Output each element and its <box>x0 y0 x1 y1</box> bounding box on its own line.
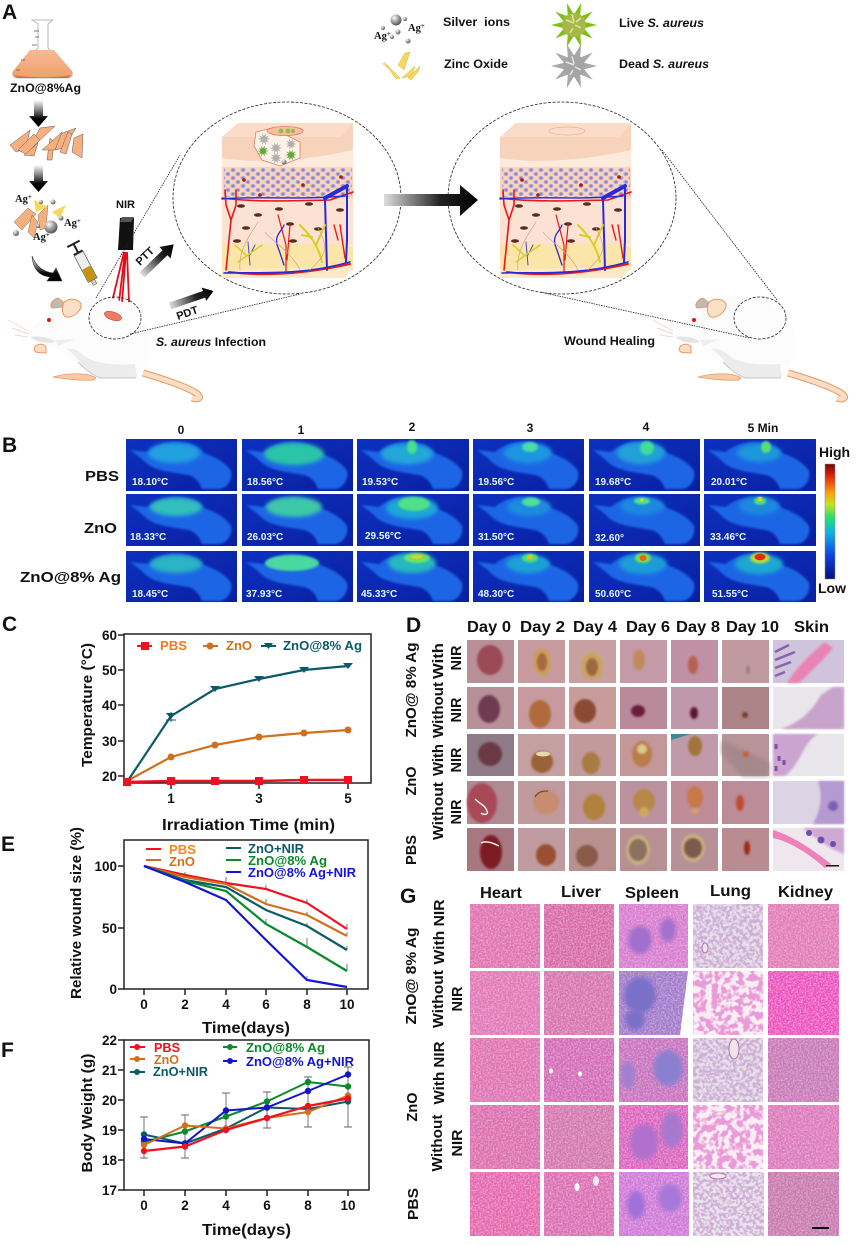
panel G: organ histology <box>400 883 839 1236</box>
legend: ZnO <box>169 854 195 869</box>
column headers: Day 6 <box>626 619 670 636</box>
panel letter F: F <box>1 1039 14 1062</box>
legend: PBS <box>169 842 196 857</box>
label NIR: NIR <box>116 199 135 211</box>
histology row 1 <box>470 904 839 968</box>
label PDT: PDT <box>175 304 200 323</box>
x axis title: Time(days) <box>202 1020 290 1037</box>
laser beams <box>112 252 129 302</box>
column headers: Day 10 <box>726 619 779 636</box>
arrow: PTT <box>136 239 179 281</box>
column headers: Day 0 <box>467 619 511 636</box>
y axis title: Temperature (°C) <box>80 643 96 767</box>
legend: ZnO+NIR <box>248 841 305 856</box>
series: ZnO@8% Ag <box>127 663 353 782</box>
histology row 5 <box>470 1172 839 1236</box>
x ticks <box>167 791 352 806</box>
wound row 2 <box>467 687 844 729</box>
icon: flakes loaded with silver ions <box>13 193 81 243</box>
colour scale bar: Low <box>818 580 846 596</box>
legend: ZnO@8% Ag+NIR <box>248 865 357 880</box>
panel letter D: D <box>406 614 421 637</box>
x ticks: 3 <box>255 791 263 806</box>
column headers: 4 <box>643 420 650 434</box>
wound row 5 <box>467 828 844 871</box>
column headers: Day 8 <box>676 619 720 636</box>
column headers: Day 2 <box>520 619 565 636</box>
histology row 2 <box>470 971 839 1035</box>
thermal row: ZnO: 29.56°C <box>365 531 401 542</box>
legend: ZnO <box>226 638 252 653</box>
column headers: 1 <box>298 423 305 437</box>
axes <box>118 840 368 995</box>
legend: dead bacteria icon <box>551 44 597 88</box>
icon: flakes loaded with silver ions: + <box>46 231 50 239</box>
icon: healed mouse <box>653 296 844 399</box>
icon: syringe <box>67 240 101 288</box>
row labels: PBS <box>406 1188 422 1220</box>
panel E: wound size chart <box>1 827 368 1037</box>
icon: flakes loaded with silver ions: Ag <box>64 218 77 229</box>
row labels: ZnO <box>405 1092 421 1122</box>
x ticks: 0 <box>140 1198 148 1213</box>
column headers <box>178 420 778 437</box>
x ticks: 1 <box>167 791 175 806</box>
row labels: NIR <box>449 697 465 722</box>
column headers: Heart <box>480 885 522 902</box>
y ticks: 20 <box>102 1093 117 1108</box>
y ticks: 30 <box>102 734 117 749</box>
icon: infected mouse <box>8 296 199 399</box>
big arrow to healed skin <box>384 185 478 216</box>
x ticks: 8 <box>303 997 311 1012</box>
legend: silver ions icon: + <box>387 30 391 38</box>
series: ZnO@8% Ag+NIR <box>141 1071 351 1147</box>
y axis title: Relative wound size (%) <box>69 827 85 999</box>
arrow: curved to mouse <box>32 256 62 281</box>
thermal row: ZnO: 26.03°C <box>247 532 283 543</box>
column headers: Spleen <box>625 885 679 902</box>
icon: flakes loaded with silver ions: + <box>28 193 32 201</box>
row labels: With NIR <box>432 1041 448 1104</box>
column headers: 0 <box>178 423 185 437</box>
icon: ZnO flakes <box>10 126 83 160</box>
thermal row: PBS: 19.53°C <box>362 477 398 488</box>
legend: silver ions icon: Ag <box>408 23 421 34</box>
legend: PBS <box>160 638 187 653</box>
y ticks <box>94 859 117 997</box>
legend: ZnO+NIR <box>153 1064 209 1079</box>
thermal row: ZnO@8% Ag: 18.45°C <box>132 589 168 600</box>
y ticks: 19 <box>102 1123 117 1138</box>
x ticks: 4 <box>222 997 230 1012</box>
legend: live bacteria label: Live S. aureus <box>619 16 704 30</box>
thermal row: ZnO@8% Ag: 51.55°C <box>712 589 748 600</box>
wound row 3 <box>467 734 844 776</box>
column headers: Skin <box>794 619 829 636</box>
x ticks <box>140 997 355 1012</box>
row labels: With NIR <box>432 899 448 964</box>
row labels <box>404 642 465 865</box>
legend <box>130 1040 355 1079</box>
thermal row: ZnO: 18.33°C <box>130 532 166 543</box>
y ticks: 60 <box>102 628 117 643</box>
colour scale bar: High <box>819 444 850 460</box>
thermal row: PBS: 19.68°C <box>595 477 631 488</box>
label PTT: PTT <box>134 245 157 268</box>
series: ZnO@8% Ag+NIR <box>144 866 347 987</box>
thermal row: PBS: 18.56°C <box>247 477 283 488</box>
label S. aureus Infection: S. aureus Infection <box>156 335 266 349</box>
panel C: temperature chart <box>2 613 371 834</box>
series: ZnO@8% Ag <box>144 866 347 971</box>
legend: silver ions icon <box>374 14 425 44</box>
error bars <box>140 1067 352 1158</box>
legend <box>146 841 357 880</box>
row labels: NIR <box>449 645 465 670</box>
column headers <box>467 619 829 636</box>
panel D: wound photographs <box>404 614 844 871</box>
legend: silver ions icon: Ag <box>374 31 387 42</box>
row labels: ZnO <box>404 766 420 796</box>
panel letter C: C <box>2 613 17 636</box>
legend: silver ions label: Silver ions <box>443 15 510 29</box>
y axis title: Body Weight (g) <box>80 1053 96 1173</box>
legend: silver ions icon: + <box>421 22 425 30</box>
skin block: healed <box>500 123 631 278</box>
histology row 3 <box>470 1038 839 1102</box>
right zoom outline <box>448 102 786 339</box>
x ticks: 8 <box>304 1198 312 1213</box>
column headers: Day 4 <box>573 619 617 636</box>
legend: live bacteria icon <box>551 3 597 47</box>
scale bar <box>826 865 839 866</box>
row labels: NIR <box>449 747 465 772</box>
thermal row: ZnO@8% Ag: 50.60°C <box>595 589 631 600</box>
x ticks: 5 <box>344 791 352 806</box>
row labels: ZnO@8% Ag <box>20 569 121 586</box>
arrow: PDT <box>168 284 216 313</box>
series: ZnO+NIR <box>144 866 347 950</box>
x ticks: 6 <box>262 997 270 1012</box>
x axis title: Time(days) <box>202 1222 291 1239</box>
y ticks: 50 <box>102 921 117 936</box>
arrow: flask to flakes <box>29 100 48 127</box>
legend: ZnO@8% Ag <box>248 853 327 868</box>
row labels <box>20 468 121 586</box>
thermal row: PBS: 20.01°C <box>711 477 747 488</box>
thermal row: ZnO@8% Ag: 48.30°C <box>478 589 514 600</box>
column headers: 3 <box>527 421 534 435</box>
series: PBS <box>141 1095 351 1154</box>
y ticks: 40 <box>102 698 117 713</box>
row labels: NIR <box>450 1129 466 1156</box>
thermal row: PBS: 18.10°C <box>132 477 168 488</box>
thermal row: PBS: 19.56°C <box>478 477 514 488</box>
icon: flakes loaded with silver ions: + <box>77 217 81 225</box>
axes <box>118 634 371 789</box>
error bars <box>185 872 347 980</box>
panel F: body weight chart <box>1 1033 369 1239</box>
row labels: Without <box>430 1114 446 1172</box>
flask label: ZnO@8%Ag <box>10 81 81 95</box>
x ticks: 2 <box>181 997 189 1012</box>
thermal row: ZnO@8% Ag: 37.93°C <box>246 589 282 600</box>
left zoom outline <box>89 102 401 339</box>
legend: ZnO <box>154 1052 179 1067</box>
thermal row: ZnO: 31.50°C <box>478 532 514 543</box>
thermal row: ZnO: 33.46°C <box>710 532 746 543</box>
histology row 4 <box>470 1105 839 1169</box>
column headers <box>480 883 833 902</box>
x ticks <box>140 1198 356 1213</box>
legend: zinc oxide label: Zinc Oxide <box>444 57 508 71</box>
panel letter A: A <box>2 1 17 24</box>
x ticks: 2 <box>181 1198 189 1213</box>
arrow: flakes to silver-loaded flakes <box>29 165 48 192</box>
wound row 4 <box>467 781 844 824</box>
x ticks: 4 <box>222 1198 230 1213</box>
icon: flakes loaded with silver ions: Ag <box>33 232 46 243</box>
row labels: PBS <box>85 468 119 485</box>
icon: NIR camera <box>118 217 134 250</box>
legend: ZnO@8% Ag+NIR <box>246 1054 355 1069</box>
icon: flakes loaded with silver ions: Ag <box>15 194 28 205</box>
thermal row: ZnO <box>126 494 816 546</box>
icon: flask of ZnO@8%Ag <box>13 20 72 78</box>
row labels: ZnO <box>84 520 117 537</box>
series: ZnO <box>144 866 347 936</box>
panel B: thermal images <box>2 420 850 602</box>
y ticks: 17 <box>102 1183 117 1198</box>
y ticks <box>102 1033 117 1198</box>
column headers: Liver <box>561 884 601 901</box>
row labels: ZnO@ 8% Ag <box>404 642 420 738</box>
x ticks: 10 <box>339 997 355 1012</box>
row labels: With <box>431 643 447 679</box>
panel letter B: B <box>2 434 17 457</box>
thermal row: PBS <box>126 439 816 491</box>
row labels <box>404 899 466 1220</box>
row labels: Without <box>431 682 447 738</box>
row labels: PBS <box>404 835 420 865</box>
skin block: infected <box>222 123 353 278</box>
thermal row: ZnO: 32.60° <box>595 533 624 544</box>
column headers: 2 <box>409 420 416 434</box>
panel letter E: E <box>1 833 15 856</box>
x ticks: 10 <box>340 1198 356 1213</box>
colour scale bar <box>818 444 850 596</box>
row labels: Without <box>431 970 447 1028</box>
legend: ZnO@8% Ag <box>283 638 362 653</box>
y ticks: 0 <box>109 982 117 997</box>
legend: dead bacteria label: Dead S. aureus <box>619 57 709 71</box>
y ticks: 21 <box>102 1063 117 1078</box>
series: PBS <box>144 866 347 929</box>
y ticks: 20 <box>102 769 117 784</box>
row labels: NIR <box>450 986 466 1012</box>
series: ZnO <box>127 726 352 781</box>
legend <box>137 638 362 653</box>
series: ZnO@8% Ag <box>141 1079 351 1145</box>
x ticks: 0 <box>140 997 148 1012</box>
row labels: Without <box>431 782 447 840</box>
y ticks: 50 <box>102 663 117 678</box>
x ticks: 6 <box>263 1198 271 1213</box>
x axis title: Irradiation Time (min) <box>162 817 335 834</box>
legend: PBS <box>154 1040 180 1055</box>
series: PBS <box>123 776 352 786</box>
y ticks: 18 <box>102 1153 117 1168</box>
row labels: NIR <box>449 799 465 824</box>
legend: zinc oxide icon <box>382 52 420 80</box>
axes <box>118 1040 369 1196</box>
y ticks: 22 <box>102 1033 117 1048</box>
legend: ZnO@8% Ag <box>246 1040 325 1055</box>
label Wound Healing: Wound Healing <box>564 334 655 348</box>
column headers: Kidney <box>778 884 833 901</box>
series: ZnO+NIR <box>141 1098 351 1147</box>
scale bar <box>812 1227 829 1229</box>
y ticks: 100 <box>94 859 117 874</box>
wound row 1 <box>467 640 844 683</box>
thermal row: ZnO@8% Ag <box>126 551 816 602</box>
row labels: With <box>431 744 447 776</box>
row labels: ZnO@ 8% Ag <box>404 927 420 1025</box>
panel letter G: G <box>400 885 416 908</box>
thermal row: ZnO@8% Ag: 45.33°C <box>361 589 397 600</box>
column headers: 5 Min <box>748 421 778 435</box>
panel A: treatment schematic <box>2 1 844 399</box>
column headers: Lung <box>710 883 751 900</box>
series: ZnO <box>141 1092 351 1148</box>
y ticks <box>102 628 117 784</box>
